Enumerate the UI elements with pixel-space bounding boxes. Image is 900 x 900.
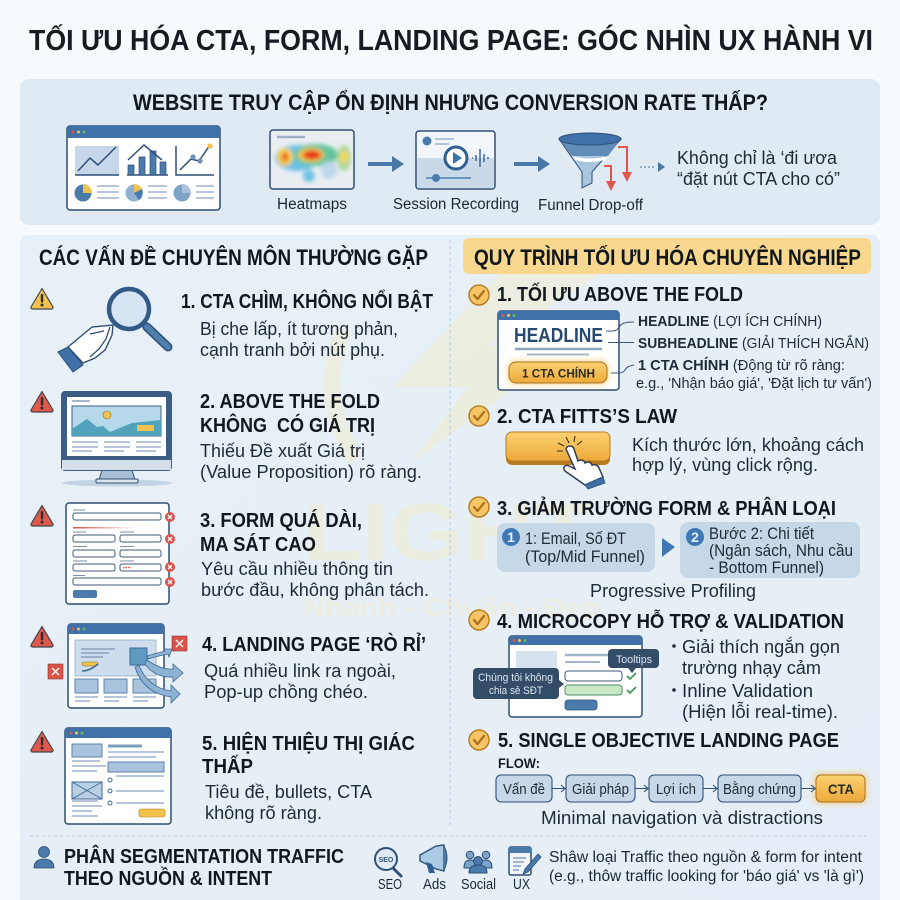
arrow: recording to funnel xyxy=(514,156,550,172)
icon: Ads xyxy=(420,845,447,893)
mockup: above the fold: 1 CTA CHÍNH xyxy=(522,366,595,380)
flow diagram: Bằng chứng xyxy=(723,781,796,798)
text: issue 2: KHÔNG CÓ GIÁ TRỊ xyxy=(200,413,375,437)
arrow: heatmap to recording xyxy=(368,156,404,172)
text: issue 5: THẤP xyxy=(202,755,253,778)
arrow: dotted to statement xyxy=(640,162,665,172)
text: issue 2: 2. ABOVE THE FOLD xyxy=(200,390,380,413)
step 1 annotations: e.g., 'Nhận báo giá', 'Đặt lịch tư vấn') xyxy=(636,376,872,392)
icon: check 2 xyxy=(469,406,489,426)
card: step two: Bước 2: Chi tiết xyxy=(709,525,814,543)
icon: long form xyxy=(66,503,175,604)
card: step two xyxy=(680,522,860,578)
icon: UX xyxy=(509,847,541,893)
text: issue 4 xyxy=(202,632,426,702)
text: issue 5: 5. HIỆN THIỆU THỊ GIÁC xyxy=(202,731,415,755)
text: segmentation heading: PHÂN SEGMENTATION TRAFFIC xyxy=(64,844,344,868)
text: issue 2: Thiếu Đề xuất Giá trị xyxy=(200,440,365,461)
caption: progressive profiling: Progressive Profiling xyxy=(590,580,756,601)
icon: session recording xyxy=(416,131,495,189)
text: issue 2: (Value Proposition) rõ ràng. xyxy=(200,461,422,482)
list: step 4 bullets: Giải thích ngắn gọn xyxy=(682,636,840,657)
panel: optimisation process xyxy=(463,238,872,828)
text: segmentation note: Shâw loại Traffic theo nguồn & form for intent xyxy=(549,849,863,866)
text: issue 5 xyxy=(202,731,415,823)
icon: check 3 xyxy=(469,497,489,517)
card: step two: (Ngân sách, Nhu cầu xyxy=(709,542,853,560)
panel: lower content xyxy=(20,235,880,900)
step 1 annotations: SUBHEADLINE (GIẢI THÍCH NGẮN) xyxy=(638,334,869,352)
card: step one xyxy=(497,523,655,572)
text: segmentation note xyxy=(549,849,864,885)
icon: warning 4 xyxy=(31,626,53,647)
step 1 heading: 1. TỐI ƯU ABOVE THE FOLD xyxy=(497,282,743,306)
label: heatmaps: Heatmaps xyxy=(277,196,347,213)
footer: traffic segmentation xyxy=(30,836,868,893)
text: issue 2 xyxy=(200,390,422,482)
step 1 annotations xyxy=(636,313,872,392)
icon: warning 5 xyxy=(31,732,53,752)
label: funnel drop-off: Funnel Drop-off xyxy=(538,197,644,214)
mockup: form with tooltips: Tooltips xyxy=(616,654,652,666)
icon: check 1 xyxy=(469,285,489,305)
text: issue 5: không rõ ràng. xyxy=(205,802,322,823)
list: step 4 bullets: trường nhạy cảm xyxy=(682,657,821,678)
text: issue 3: Yêu cầu nhiều thông tin xyxy=(201,558,393,579)
text: step 2 xyxy=(632,434,864,475)
heading: conversion question: WEBSITE TRUY CẬP ỔN ĐỊNH NHƯNG CONVERSION RATE THẤP? xyxy=(133,90,768,115)
flow diagram: Giải pháp xyxy=(572,781,629,798)
mockup: form with tooltips: Chúng tôi không xyxy=(478,672,553,684)
icon: SEO: SEO xyxy=(378,877,402,893)
icon: UX: UX xyxy=(513,877,530,893)
text: issue 4: Pop-up chồng chéo. xyxy=(204,681,368,702)
card: step one: 1: Email, Số ĐT xyxy=(525,530,626,548)
icon: leaky landing page xyxy=(48,624,187,708)
icon: monitor xyxy=(61,391,172,486)
card: step one: (Top/Mid Funnel) xyxy=(525,548,645,566)
text: segmentation note: (e.g., thôw traffic looking for 'báo giá' vs 'là gì') xyxy=(549,868,864,885)
step 1 annotations: 1 CTA CHÍNH (Động từ rõ ràng: xyxy=(638,357,845,374)
heading: common problems: CÁC VẤN ĐỀ CHUYÊN MÔN THƯỜNG GẶP xyxy=(39,245,428,270)
icon: warning 1 xyxy=(31,288,53,309)
icon: weak visual hierarchy xyxy=(65,728,171,824)
list: step 4 bullets xyxy=(672,636,840,722)
icon: funnel drop-off xyxy=(559,133,632,191)
text: issue 3: 3. FORM QUÁ DÀI, xyxy=(200,509,362,532)
list: step 4 bullets: (Hiện lỗi real-time). xyxy=(682,701,838,722)
icon: analytics dashboard xyxy=(67,126,220,210)
icon: heatmap xyxy=(270,130,354,189)
icon: warning 2 xyxy=(31,392,53,412)
icon: Social xyxy=(461,851,496,893)
flow diagram xyxy=(496,773,867,804)
text: statement: Không chỉ là ‘đi ươa xyxy=(677,147,838,168)
icon: check 4 xyxy=(469,610,489,630)
step 2 heading: 2. CTA FITTS’S LAW xyxy=(497,405,678,428)
text: statement xyxy=(677,147,840,189)
text: issue 1: 1. CTA CHÌM, KHÔNG NỔI BẬT xyxy=(181,289,433,313)
text: segmentation heading: THEO NGUỒN & INTENT xyxy=(64,866,272,890)
list: step 4 bullets: Inline Validation xyxy=(682,680,813,701)
icon: Ads: Ads xyxy=(423,877,446,893)
icon: person xyxy=(34,846,54,868)
text: issue 1: Bị che lấp, ít tương phản, xyxy=(200,318,398,339)
mockup: above the fold xyxy=(498,311,619,390)
text: issue 1: cạnh tranh bởi nút phụ. xyxy=(200,339,385,360)
text: statement: “đặt nút CTA cho có” xyxy=(677,168,840,189)
card: step one: 1 xyxy=(507,529,515,545)
mockup: above the fold: HEADLINE xyxy=(514,325,603,347)
panel: top problem summary xyxy=(20,79,880,225)
mockup: form with tooltips xyxy=(473,636,659,717)
text: step 2: hợp lý, vùng click rộng. xyxy=(632,454,818,475)
mockup: form with tooltips: chia sẻ SĐT xyxy=(489,685,543,697)
text: issue 4: 4. LANDING PAGE ‘RÒ RỈ’ xyxy=(202,632,426,656)
flow diagram: CTA xyxy=(828,781,854,797)
step 3 heading: 3. GIẢM TRƯỜNG FORM & PHÂN LOẠI xyxy=(497,496,836,520)
label: session recording: Session Recording xyxy=(393,196,519,213)
card: step two: - Bottom Funnel) xyxy=(709,559,824,577)
watermark: lightning logo: Nhanh - Chuẩn - Đẹp xyxy=(303,594,600,622)
panel: common problems xyxy=(31,245,433,824)
icon: check 5 xyxy=(469,730,489,750)
icon: Social: Social xyxy=(461,877,496,893)
icon: big button with pointer xyxy=(506,432,610,489)
connectors xyxy=(606,322,634,373)
text: segmentation heading xyxy=(64,844,344,890)
caption: minimal navigation: Minimal navigation và distractions xyxy=(541,807,823,828)
icon: magnifier with hand xyxy=(58,289,168,372)
heading: process xyxy=(463,238,871,274)
step 4 heading: 4. MICROCOPY HỖ TRỢ & VALIDATION xyxy=(497,609,844,633)
watermark: lightning logo xyxy=(303,268,610,622)
watermark: lightning logo: LIGHT xyxy=(303,487,593,578)
text: issue 4: Quá nhiều link ra ngoài, xyxy=(204,660,396,681)
text: step 2: Kích thước lớn, khoảng cách xyxy=(632,434,864,455)
icon: warning 3 xyxy=(31,506,53,526)
text: issue 3: MA SÁT CAO xyxy=(200,533,316,556)
icon: SEO: SEO xyxy=(379,857,394,864)
card: step two: 2 xyxy=(691,529,699,545)
step 1 annotations: HEADLINE (LỢI ÍCH CHÍNH) xyxy=(638,313,822,330)
arrow: step one to step two xyxy=(662,538,675,557)
icon: SEO xyxy=(375,848,402,893)
text: issue 3 xyxy=(200,509,429,600)
flow diagram: Lợi ích xyxy=(656,781,696,798)
text: issue 1 xyxy=(181,289,433,360)
text: issue 3: bước đầu, không phân tách. xyxy=(201,579,429,600)
label: flow: FLOW: xyxy=(498,755,540,771)
flow diagram: Vấn đề xyxy=(503,781,545,798)
text: issue 5: Tiêu đề, bullets, CTA xyxy=(205,781,372,802)
divider xyxy=(449,240,451,826)
step 5 heading: 5. SINGLE OBJECTIVE LANDING PAGE xyxy=(498,729,839,752)
